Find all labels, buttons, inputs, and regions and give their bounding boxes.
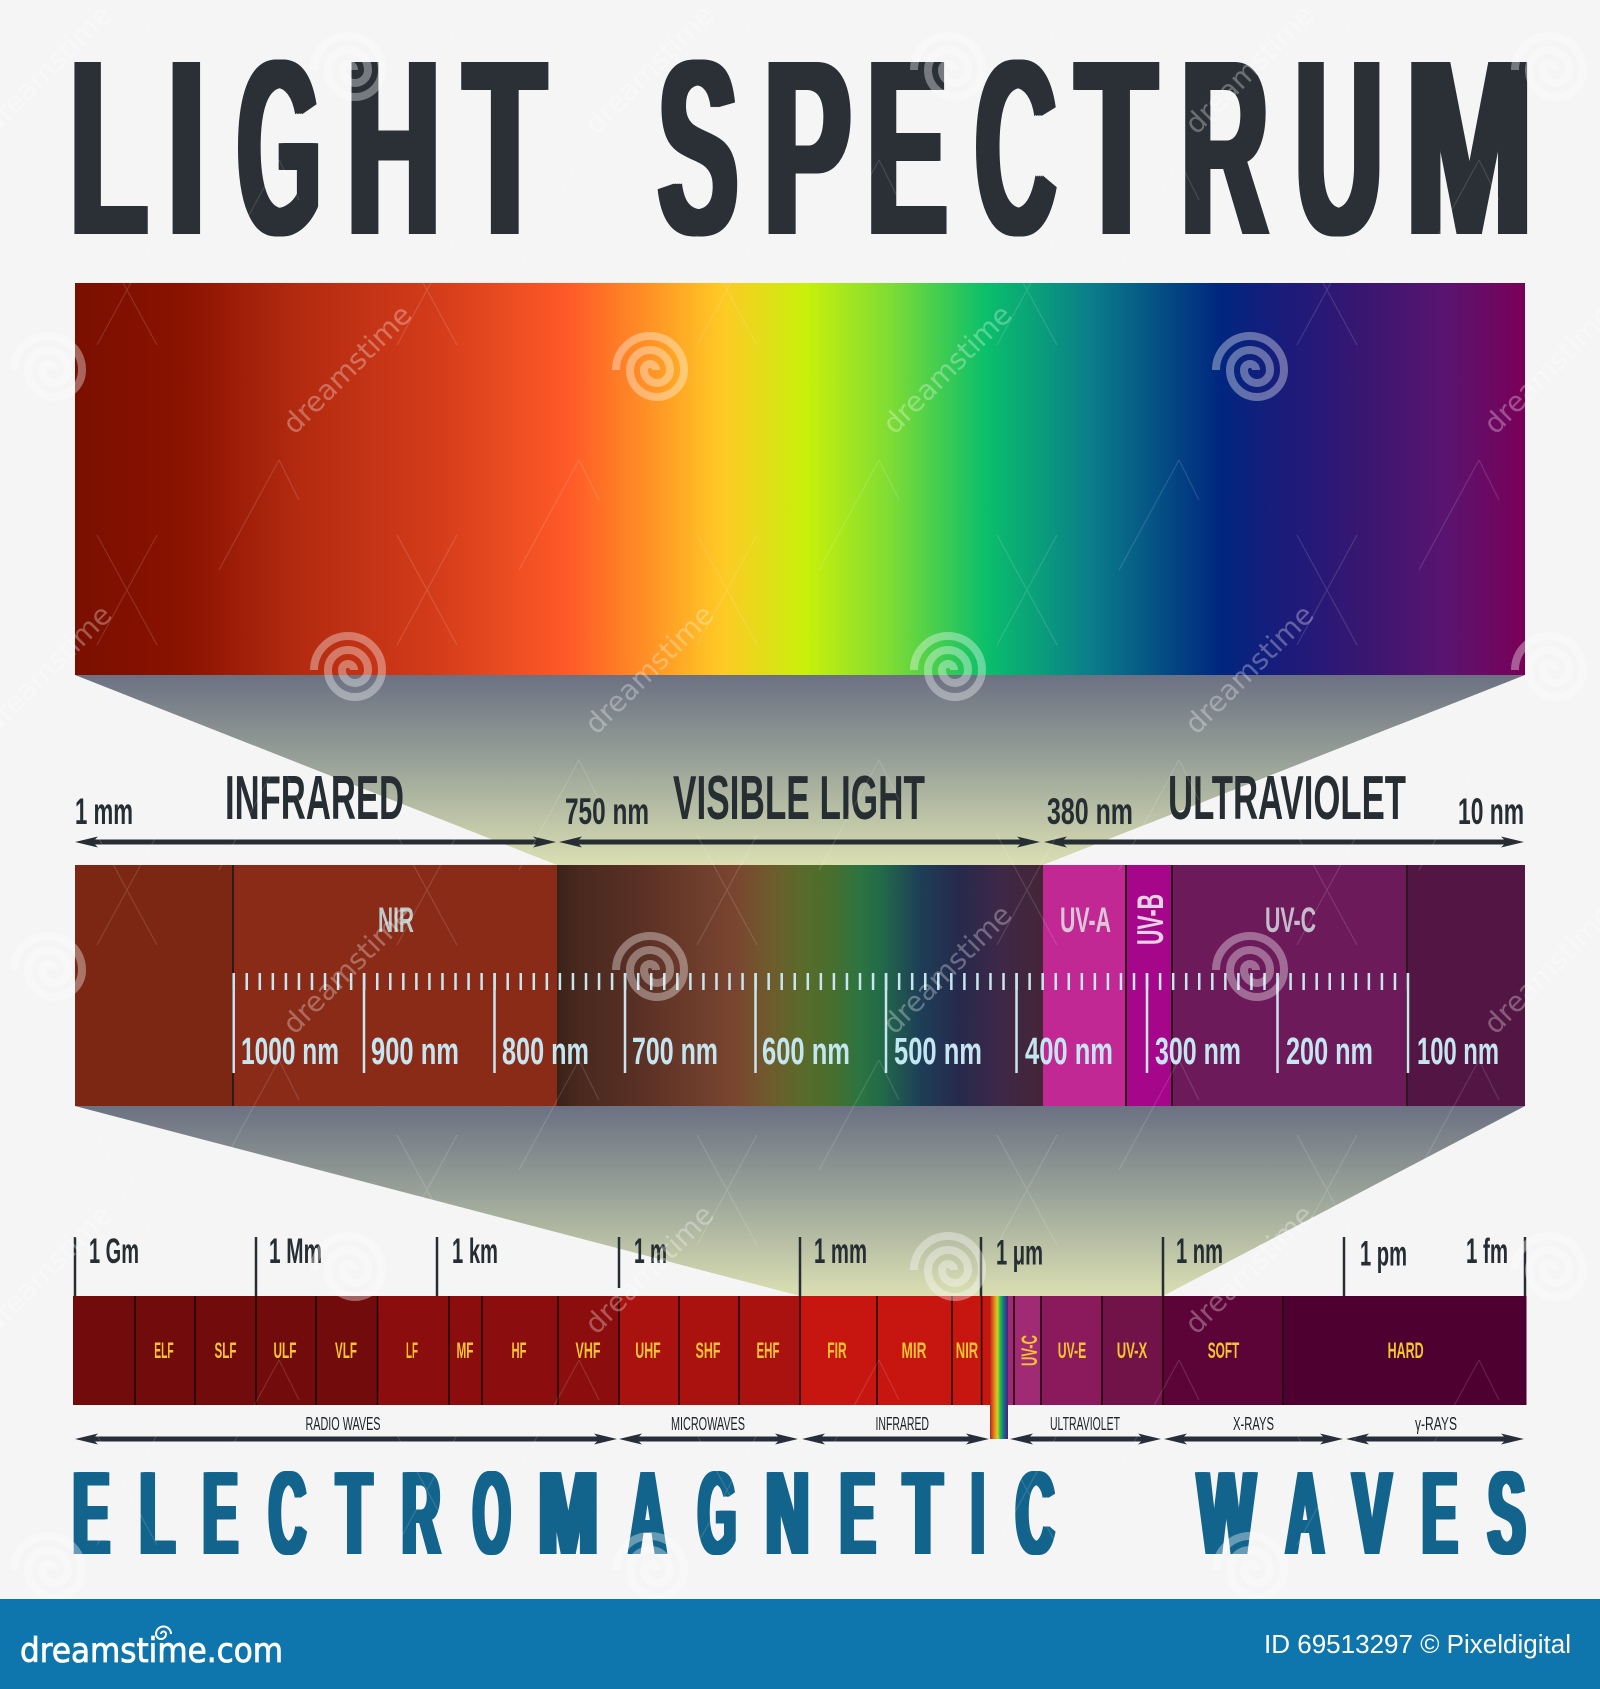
subtitle: electromagnetic waves: E <box>840 1447 876 1580</box>
subtitle: electromagnetic waves: O <box>472 1447 510 1580</box>
wave family labels: X-RAYS <box>1233 1414 1274 1434</box>
ruler labels: 1 mm <box>814 1232 867 1271</box>
wave family labels: RADIO WAVES <box>306 1414 380 1434</box>
watermark text: dreamstime <box>876 298 1018 440</box>
band labels: ULF <box>274 1338 296 1363</box>
scale labels: 1000 nm <box>241 1031 339 1073</box>
ruler labels: 1 Mm <box>269 1232 322 1271</box>
band labels: NIR <box>956 1338 978 1363</box>
label: UV-B: UV-B <box>1130 894 1171 945</box>
wave family labels: γ-RAYS <box>1415 1414 1457 1434</box>
wave family arrows <box>75 1434 1524 1444</box>
title: light spectrum: U <box>1295 8 1383 287</box>
scale labels: 800 nm <box>502 1031 589 1073</box>
title: light spectrum: H <box>347 8 441 287</box>
ruler labels: 1 Gm <box>89 1232 139 1271</box>
band labels: SOFT <box>1208 1338 1240 1363</box>
band labels: VHF <box>576 1338 600 1363</box>
wave family labels: MICROWAVES <box>671 1414 745 1434</box>
label: 1 mm: 1 mm <box>75 791 133 832</box>
lower funnel <box>75 1106 1525 1296</box>
subtitle: electromagnetic waves: T <box>337 1447 371 1580</box>
band labels: EHF <box>756 1338 780 1363</box>
panel: wavelength ruler <box>75 1232 1525 1296</box>
watermark text: dreamstime <box>578 598 720 740</box>
band labels: LF <box>406 1338 418 1363</box>
subtitle: electromagnetic waves: I <box>971 1447 984 1580</box>
subtitle: electromagnetic waves: G <box>698 1447 736 1580</box>
watermark text: dreamstime <box>1178 598 1320 740</box>
subtitle: electromagnetic waves: M <box>539 1447 598 1580</box>
wave family labels <box>306 1414 1457 1434</box>
subtitle: electromagnetic waves: V <box>1353 1447 1391 1580</box>
watermark text: dreamstime <box>578 0 720 140</box>
scale labels: 200 nm <box>1286 1031 1373 1073</box>
title: light spectrum: T <box>1076 8 1157 287</box>
subtitle: electromagnetic waves: N <box>766 1447 809 1580</box>
segment: far infrared <box>75 865 233 1106</box>
watermark text <box>0 0 1600 1340</box>
footer logo text: dreamstime.com <box>20 1631 283 1671</box>
subtitle: electromagnetic waves: A <box>1286 1447 1324 1580</box>
band labels: MF <box>456 1338 474 1363</box>
band labels <box>154 1335 1424 1366</box>
scale ticks <box>232 973 1409 1073</box>
label: UV-A: UV-A <box>1060 901 1111 940</box>
title: light spectrum: P <box>764 8 851 287</box>
heading: infrared: INFRARED <box>225 764 404 833</box>
arrow: visible range <box>559 836 1040 848</box>
ruler labels <box>89 1232 1508 1274</box>
band colours <box>73 1296 1526 1405</box>
band labels: UV-E <box>1058 1338 1086 1363</box>
ruler labels: 1 pm <box>1360 1234 1407 1274</box>
title: light spectrum: E <box>867 8 947 287</box>
label: 10 nm: 10 nm <box>1458 791 1524 832</box>
title: light spectrum: T <box>464 8 546 287</box>
arrow: infrared range <box>75 836 556 848</box>
watermark text: dreamstime <box>578 1198 720 1340</box>
footer credit: ID 69513297 © Pixeldigital <box>1264 1631 1571 1659</box>
subtitle: electromagnetic waves: A <box>629 1447 666 1580</box>
panel: wavelength scale band <box>75 865 1525 1106</box>
label: 380 nm: 380 nm <box>1047 791 1133 832</box>
heading: ultraviolet: ULTRAVIOLET <box>1168 764 1406 833</box>
title: light spectrum: C <box>975 8 1056 287</box>
band labels: VLF <box>335 1338 357 1363</box>
title: light spectrum: G <box>237 8 322 287</box>
subtitle: electromagnetic waves: C <box>269 1447 306 1580</box>
scale labels: 600 nm <box>762 1031 850 1073</box>
title: light spectrum: S <box>658 8 738 287</box>
subtitle: electromagnetic waves: W <box>1198 1447 1255 1580</box>
panel: range headings <box>75 764 1524 848</box>
scale labels: 700 nm <box>632 1031 718 1073</box>
heading: visible light: VISIBLE LIGHT <box>673 764 925 833</box>
watermark text: dreamstime <box>1178 0 1320 140</box>
arrow: ultraviolet range <box>1044 836 1524 848</box>
scale labels <box>241 1031 1499 1073</box>
band labels: UHF <box>635 1338 661 1363</box>
ruler labels: 1 μm <box>996 1234 1043 1272</box>
band labels: HARD <box>1388 1338 1424 1363</box>
scale labels: 100 nm <box>1417 1031 1499 1073</box>
ruler labels: 1 nm <box>1176 1232 1223 1271</box>
icon: small spiral <box>156 1627 171 1639</box>
ruler labels: 1 fm <box>1466 1232 1508 1271</box>
subtitle: electromagnetic waves: T <box>904 1447 941 1580</box>
scale labels: 900 nm <box>371 1031 459 1073</box>
label: 750 nm: 750 nm <box>565 791 649 832</box>
upper funnel <box>75 675 1525 865</box>
subtitle: electromagnetic waves: E <box>203 1447 238 1580</box>
watermark text: dreamstime <box>276 298 418 440</box>
band labels: SLF <box>214 1338 236 1363</box>
watermark text: dreamstime <box>1178 1198 1320 1340</box>
band labels: FIR <box>827 1338 847 1363</box>
watermark text: dreamstime <box>276 898 418 1040</box>
subtitle: electromagnetic waves: S <box>1488 1447 1526 1580</box>
subtitle: electromagnetic waves: C <box>1016 1447 1054 1580</box>
band labels: SHF <box>696 1338 720 1363</box>
band labels: MIR <box>902 1338 927 1363</box>
title: light spectrum: I <box>168 8 205 287</box>
scale labels: 300 nm <box>1155 1031 1241 1073</box>
segment: near infrared <box>233 865 557 1106</box>
spectrum gradient bar <box>75 283 1525 675</box>
ruler ticks <box>75 1237 1525 1296</box>
band labels: ELF <box>154 1338 174 1363</box>
segment: UV-A <box>1043 865 1126 1106</box>
scale labels: 400 nm <box>1025 1031 1113 1073</box>
panel: electromagnetic band <box>73 1296 1526 1444</box>
scale labels: 500 nm <box>894 1031 982 1073</box>
ruler labels: 1 km <box>452 1232 498 1271</box>
subtitle: electromagnetic waves: R <box>402 1447 441 1580</box>
footer bar <box>0 1599 1600 1689</box>
subtitle: electromagnetic waves: E <box>1422 1447 1458 1580</box>
band labels: UV-C <box>1017 1335 1042 1366</box>
segment: visible <box>557 865 1043 1106</box>
segment: UV-B <box>1126 865 1172 1106</box>
segment: far UV <box>1407 865 1525 1106</box>
visible light strip <box>990 1296 1008 1439</box>
subtitle: electromagnetic waves: E <box>73 1447 110 1580</box>
wave family labels: INFRARED <box>876 1414 929 1434</box>
label: UV-C: UV-C <box>1265 901 1316 940</box>
band labels: UV-X <box>1117 1338 1147 1363</box>
ruler labels: 1 m <box>634 1232 667 1271</box>
band labels: HF <box>512 1338 526 1363</box>
label: NIR: NIR <box>378 901 414 940</box>
watermark text: dreamstime <box>876 898 1018 1040</box>
title: light spectrum: M <box>1406 8 1532 287</box>
segment: UV-C <box>1172 865 1407 1106</box>
subtitle: electromagnetic waves: L <box>140 1447 174 1580</box>
title: light spectrum: L <box>70 8 147 287</box>
wave family labels: ULTRAVIOLET <box>1050 1414 1120 1434</box>
title: light spectrum: R <box>1181 8 1268 287</box>
